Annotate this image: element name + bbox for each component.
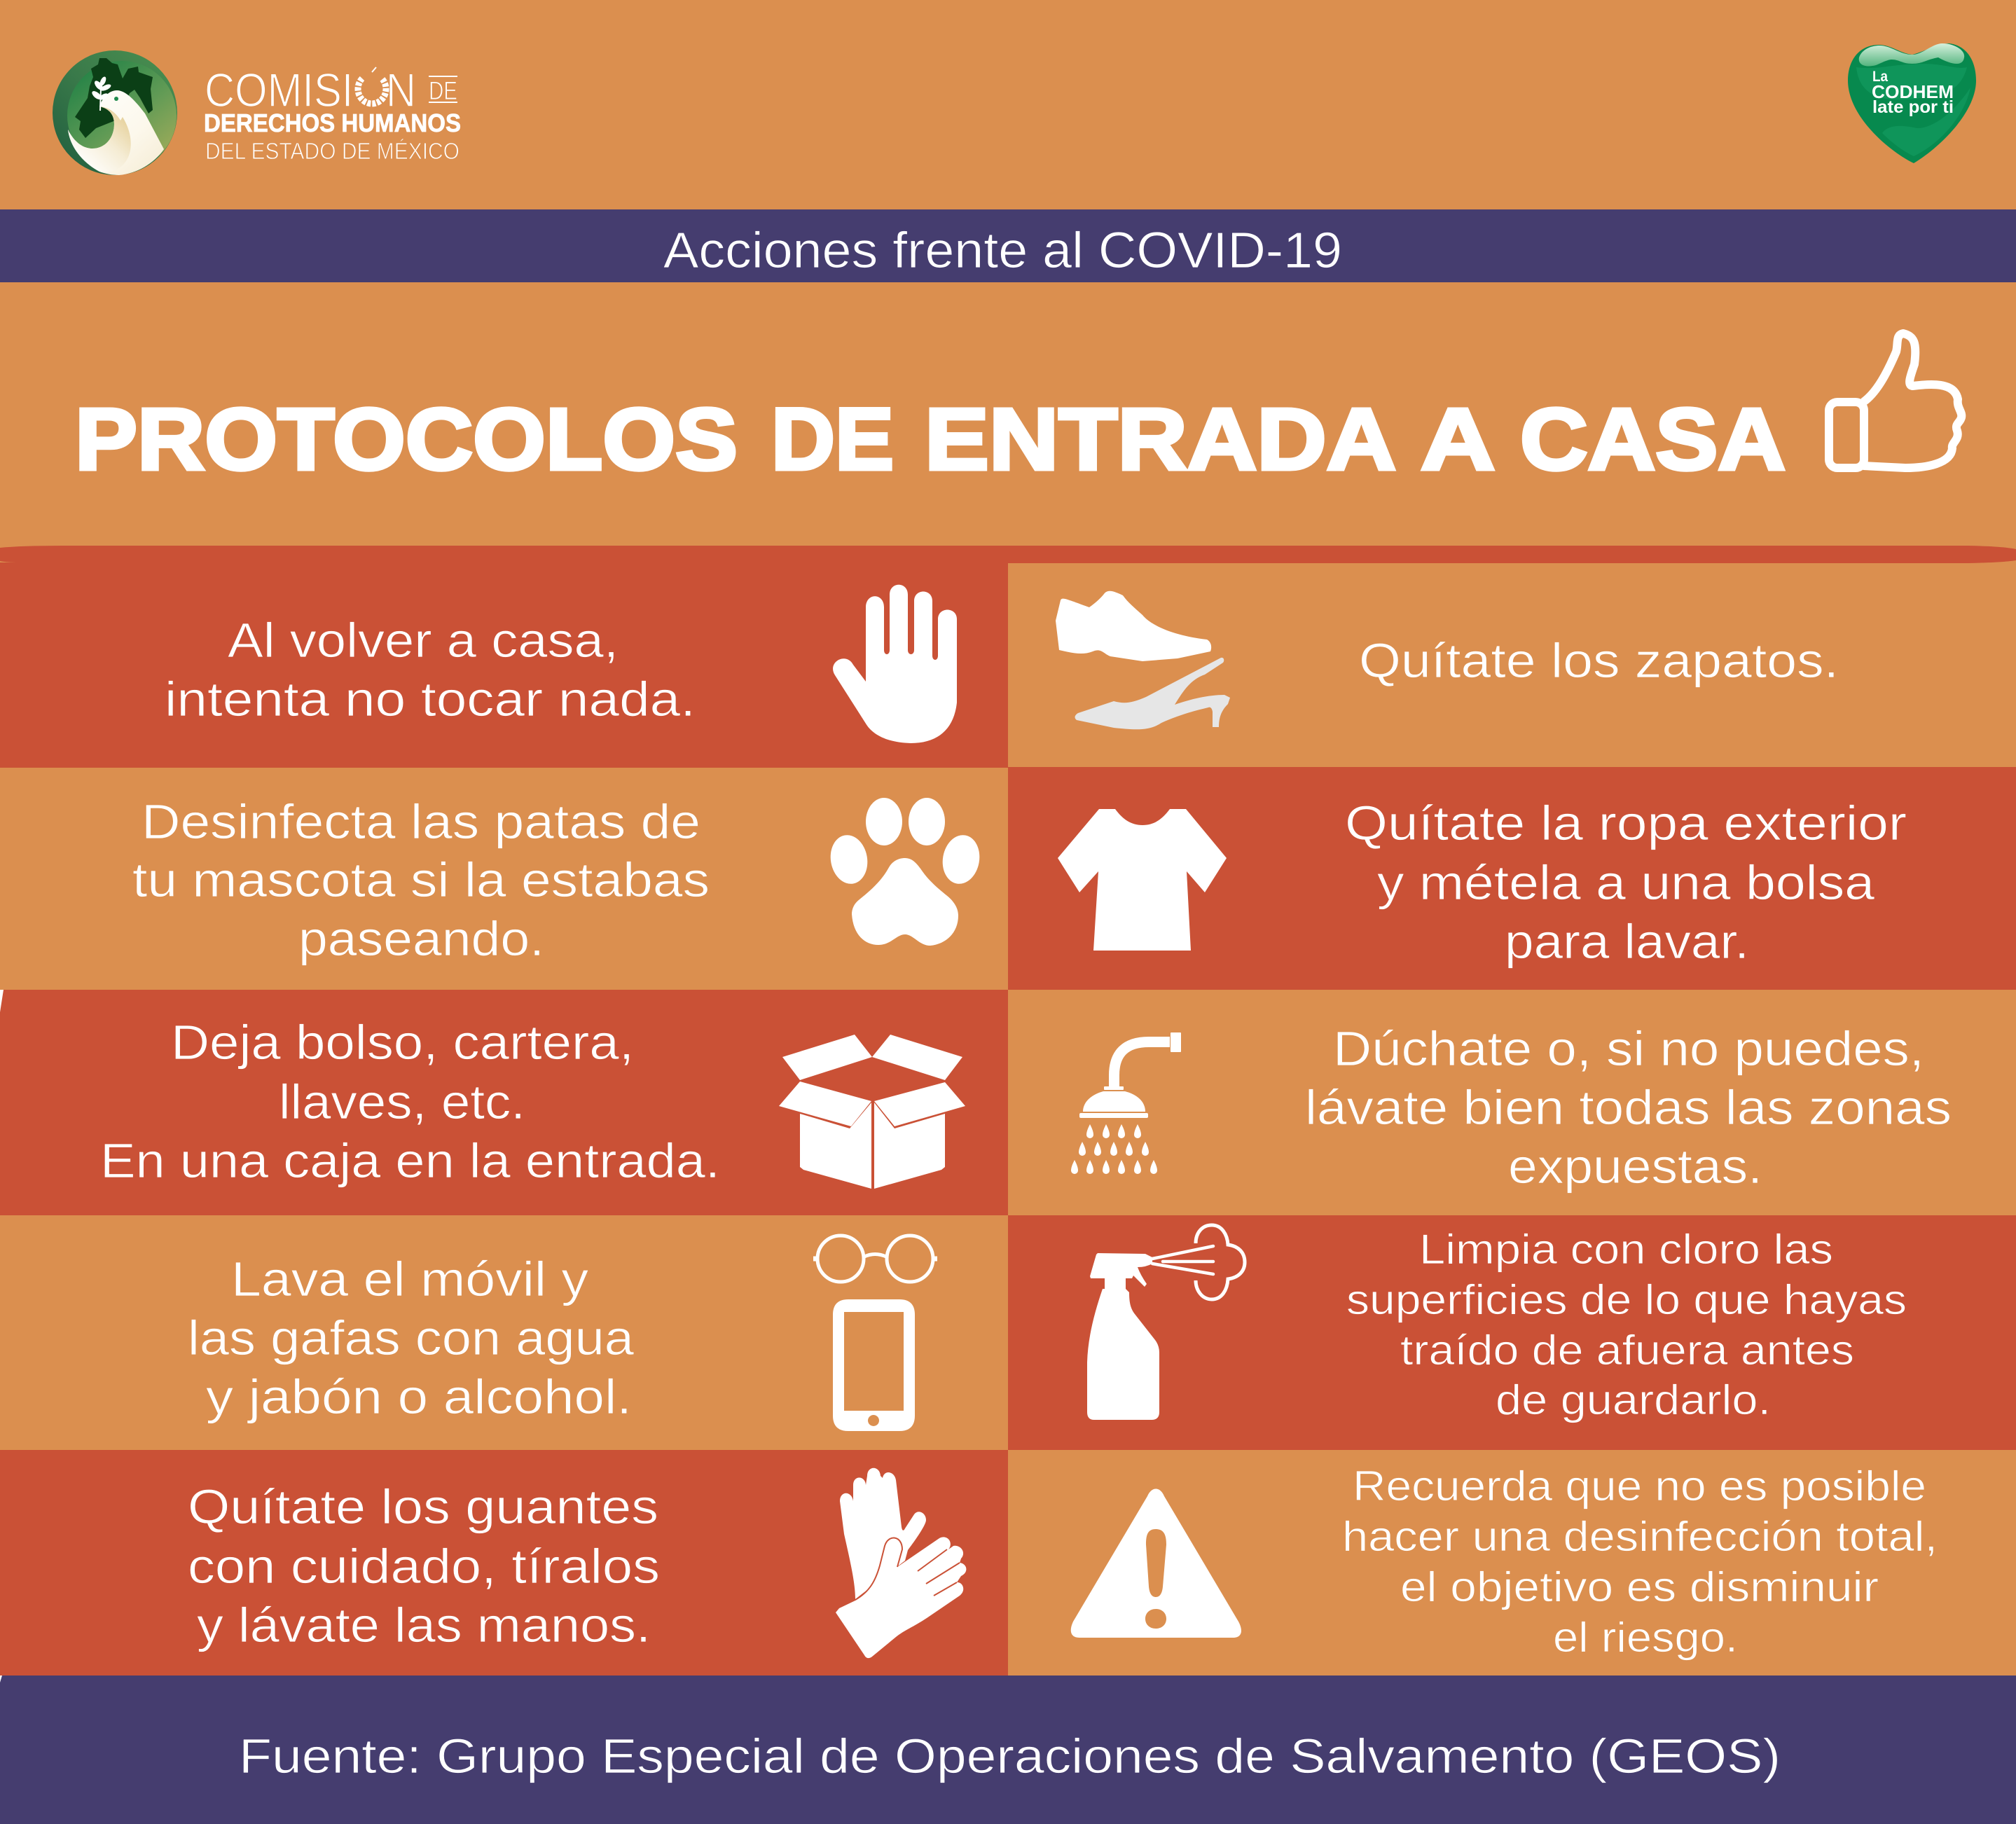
panel: Limpia con cloro: [1008, 1215, 2016, 1450]
title: CASA: [1520, 391, 1786, 488]
panel: Al volver a casa: [0, 562, 1008, 768]
subtitle band: [0, 209, 2016, 282]
icon: box: [779, 1035, 965, 1189]
panel: Dúchate: lávate bien todas las zonas: [1305, 1080, 1952, 1135]
panel: Quítate la ropa: y métela a una bolsa: [1377, 855, 1875, 910]
title: PROTOCOLOS: [75, 391, 738, 488]
panel: Deja bolso: [0, 990, 1008, 1215]
panel: Lava el móvil: [0, 1215, 1008, 1450]
icon: hand: [833, 585, 957, 743]
icon: phone: [833, 1299, 915, 1431]
panel: Recuerda: el objetivo es disminuir: [1400, 1563, 1879, 1610]
panel: Desinfecta las patas: paseando.: [298, 911, 544, 966]
panel: Al volver a casa: intenta no tocar nada.: [165, 672, 696, 726]
panel: Deja bolso: llaves, etc.: [279, 1075, 525, 1129]
panel: Quítate los guantes: Quítate los guantes: [188, 1479, 658, 1534]
panel: Quítate los zapatos: Quítate los zapatos.: [1359, 633, 1839, 688]
icon: spray bottle: [1087, 1225, 1245, 1420]
laurel wreath: [358, 67, 386, 104]
logo wordmark: DE: [429, 76, 457, 105]
icon: warning triangle: [1071, 1489, 1241, 1638]
panel: Quítate los guantes: con cuidado, tíralos: [188, 1539, 660, 1594]
icon: shoes: [1056, 591, 1230, 729]
icon: paw: [827, 798, 983, 946]
logo: green heart: La: [1872, 69, 1888, 85]
logo: green heart: late por ti: [1872, 97, 1954, 117]
panel: Recuerda: el riesgo.: [1553, 1614, 1738, 1661]
logo: green heart: CODHEM: [1872, 81, 1954, 102]
panel: Lava el móvil: y jabón o alcohol.: [206, 1369, 632, 1424]
logo: green heart: [1848, 43, 1976, 163]
panel: Limpia con cloro: de guardarlo.: [1496, 1376, 1771, 1423]
panel: Lava el móvil: Lava el móvil y: [231, 1252, 588, 1306]
panel: Quítate los zapatos: [1008, 563, 2016, 767]
icon: glasses: [813, 1236, 937, 1282]
footer band: Fuente: Grupo Especial de Operaciones de Salvamento (GEOS): [239, 1729, 1781, 1783]
icon: shirt: [1058, 809, 1227, 951]
panel: Limpia con cloro: superficies de lo que hayas: [1346, 1276, 1907, 1323]
logo wordmark: DERECHOS HUMANOS: [204, 109, 461, 137]
panel: Quítate la ropa: [1008, 767, 2016, 990]
panel: Limpia con cloro: traído de afuera antes: [1400, 1327, 1854, 1374]
title: [75, 333, 1961, 488]
icon: shower: [1071, 1032, 1181, 1174]
panel: Deja bolso: Deja bolso, cartera,: [171, 1015, 634, 1070]
logo wordmark: DEL ESTADO DE MÉXICO: [205, 138, 460, 164]
logo: state emblem with dove: [53, 50, 177, 175]
title: A: [1421, 391, 1493, 488]
panel: Quítate la ropa: Quítate la ropa exterior: [1345, 796, 1907, 850]
panel: Limpia con cloro: Limpia con cloro las: [1419, 1226, 1833, 1273]
red band at top of grid: [0, 546, 2016, 630]
footer band: [0, 1676, 2016, 1824]
panel: Desinfecta las patas: Desinfecta las patas de: [141, 794, 700, 849]
panel: Dúchate: Dúchate o, si no puedes,: [1333, 1021, 1924, 1076]
panel: Deja bolso: En una caja en la entrada.: [100, 1133, 720, 1188]
title: ENTRADA: [925, 391, 1393, 488]
subtitle band: Acciones frente al COVID-19: [663, 223, 1342, 279]
panel: Dúchate: [1008, 990, 2016, 1215]
icon: gloves: [836, 1468, 966, 1658]
panel: Dúchate: expuestas.: [1508, 1139, 1762, 1194]
panel: Al volver a casa: Al volver a casa,: [228, 613, 619, 668]
icon: thumbs up: [1829, 333, 1961, 468]
panel: Desinfecta las patas: tu mascota si la estabas: [132, 852, 710, 907]
panel: Quítate la ropa: para lavar.: [1505, 914, 1749, 969]
header band: [0, 0, 2016, 209]
panel: Desinfecta las patas: [0, 768, 1008, 990]
logo wordmark: [204, 64, 461, 164]
panel: Lava el móvil: las gafas con agua: [188, 1311, 634, 1365]
title: DE: [771, 391, 894, 488]
panel: Quítate los guantes: [0, 1450, 1008, 1676]
panel: Recuerda: Recuerda que no es posible: [1353, 1463, 1926, 1509]
logo wordmark: COMISIÓN: [205, 64, 416, 117]
panel: Quítate los guantes: y lávate las manos.: [197, 1598, 651, 1652]
panel: Recuerda: [1008, 1450, 2016, 1676]
panel: Recuerda: hacer una desinfección total,: [1342, 1513, 1938, 1560]
